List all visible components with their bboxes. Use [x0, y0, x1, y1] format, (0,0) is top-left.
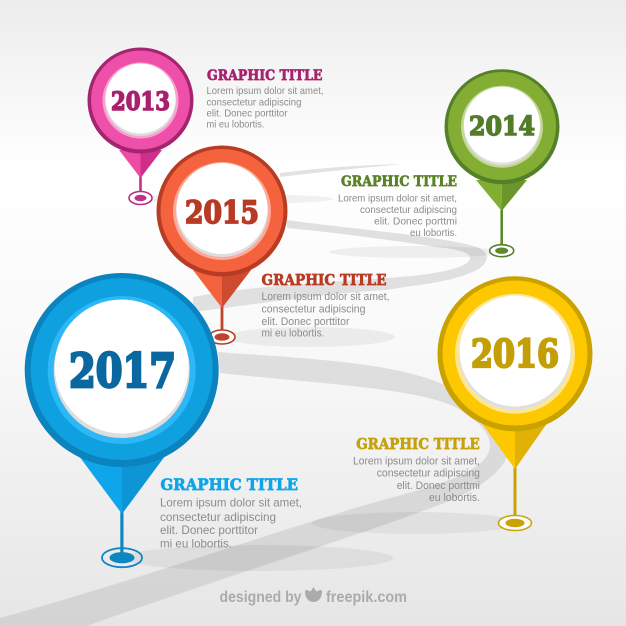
pin point [481, 422, 548, 469]
text block 2016: consectetur adipiscing [377, 468, 480, 480]
pin head [444, 69, 560, 184]
pin base [129, 172, 152, 204]
text block 2015 [262, 271, 390, 340]
pin 2016 [438, 276, 592, 530]
winding road [0, 164, 510, 626]
year 2016: 2016 [471, 331, 559, 376]
year 2014: 2014 [469, 112, 535, 142]
text block 2015: consectetur adipiscing [262, 304, 366, 316]
text block 2015: elit. Donec porttitor [262, 316, 350, 328]
text block 2017 [160, 475, 302, 551]
text block 2017: Lorem ipsum dolor sit amet, [160, 496, 302, 510]
text block 2014: eu lobortis. [410, 227, 457, 239]
pin base [490, 203, 514, 257]
text block 2013 [206, 68, 324, 131]
pin head [88, 48, 194, 154]
text block 2017: elit. Donec porttitor [160, 523, 258, 537]
pin base [209, 300, 235, 344]
pin 2013 [88, 48, 194, 204]
footer credit [220, 587, 407, 606]
text block 2013: elit. Donec porttitor [206, 108, 288, 120]
footer credit: designed by [220, 589, 302, 606]
text block 2014: consectetur adipiscing [360, 204, 457, 216]
pin head [25, 273, 219, 467]
text block 2014 [338, 174, 457, 239]
text block 2013: mi eu lobortis. [206, 119, 264, 131]
text block 2015: mi eu lobortis. [262, 328, 324, 340]
text block 2014: Lorem ipsum dolor sit amet, [338, 192, 457, 204]
pin 2017 [25, 273, 219, 567]
text block 2017: mi eu lobortis. [160, 537, 232, 551]
pin head [156, 146, 288, 276]
year 2017: 2017 [69, 344, 176, 399]
text block 2017: consectetur adipiscing [160, 510, 276, 524]
text block 2015: GRAPHIC TITLE [262, 271, 386, 289]
text block 2013: consectetur adipiscing [206, 97, 302, 109]
year 2015: 2015 [185, 195, 259, 231]
pin 2015 [156, 146, 288, 344]
text block 2014: GRAPHIC TITLE [341, 174, 457, 190]
text block 2016: eu lobortis. [429, 492, 480, 504]
text block 2016 [353, 435, 480, 504]
text block 2017: GRAPHIC TITLE [160, 475, 298, 494]
text block 2016: Lorem ipsum dolor sit amet, [353, 455, 480, 467]
text block 2014: elit. Donec porttmi [374, 216, 457, 228]
year 2013: 2013 [111, 87, 170, 116]
text block 2016: elit. Donec porttmi [397, 480, 480, 492]
pin point [193, 270, 251, 308]
pin shadows [123, 194, 518, 571]
footer credit: freepik.com [326, 589, 407, 606]
pin head [438, 276, 592, 431]
pin point [476, 180, 527, 211]
text block 2013: GRAPHIC TITLE [207, 68, 322, 84]
pin 2014 [444, 69, 560, 257]
text block 2015: Lorem ipsum dolor sit amet, [262, 291, 390, 303]
icon: freepik logo [305, 587, 322, 602]
pin point [79, 456, 165, 514]
pin base [498, 460, 532, 530]
text block 2013: Lorem ipsum dolor sit amet, [206, 85, 324, 97]
pin base [102, 505, 142, 567]
text block 2016: GRAPHIC TITLE [356, 435, 480, 453]
pin point [119, 150, 162, 178]
